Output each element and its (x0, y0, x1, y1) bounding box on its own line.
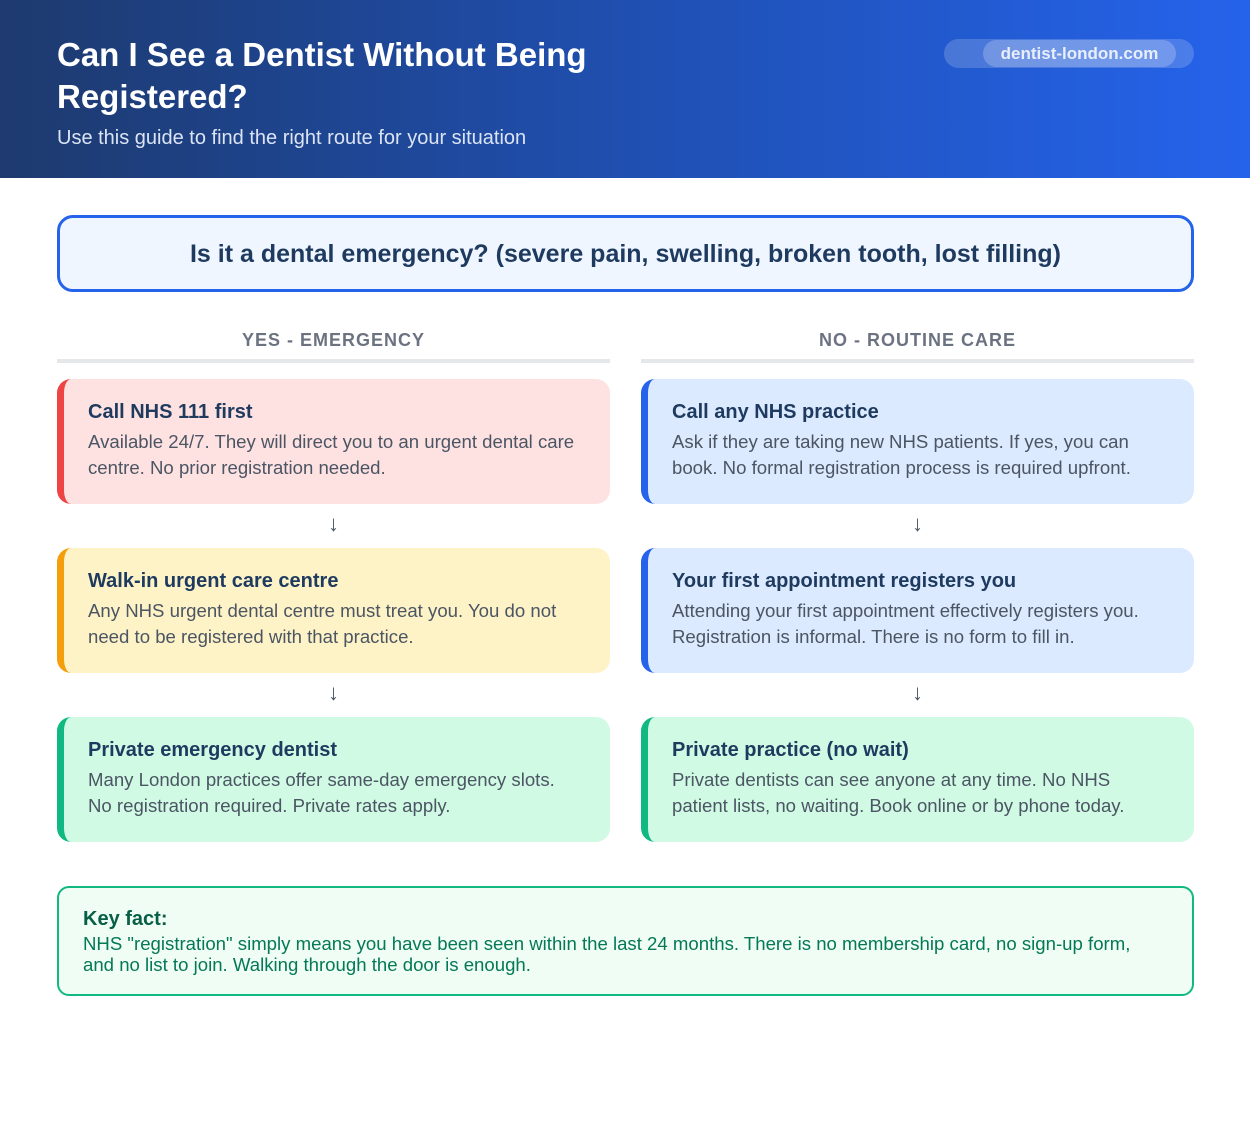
question box (57, 215, 1194, 292)
arrow: ↓ (912, 680, 923, 705)
key fact callout: Key fact: (83, 908, 167, 930)
card: call NHS practice: Ask if they are taking new NHS patients. If yes, you can book. No formal registration process is required upfront. (672, 431, 1131, 478)
site pill: dentist-london.com (1001, 44, 1158, 63)
subtitle: Use this guide to find the right route for your situation (57, 127, 526, 149)
arrow: ↓ (328, 680, 339, 705)
card: first appointment: Your first appointment registers you (672, 570, 1016, 592)
card: first appointment: Attending your first appointment effectively registers you. Registration is informal. There is no form to fill in. (672, 600, 1139, 647)
card: walk-in (57, 548, 610, 673)
key fact callout (57, 886, 1194, 996)
card: private emergency (57, 717, 610, 842)
title: Can I See a Dentist Without Being Registered? (57, 36, 587, 115)
card: call NHS 111: Available 24/7. They will direct you to an urgent dental care centre. No prior registration needed. (88, 431, 574, 478)
header banner (0, 0, 1250, 178)
arrow: ↓ (328, 511, 339, 536)
card: private emergency: Many London practices offer same-day emergency slots. No registration required. Private rates apply. (88, 769, 555, 816)
column heading: no: NO - ROUTINE CARE (819, 330, 1016, 350)
site pill (944, 39, 1194, 68)
card: first appointment (641, 548, 1194, 673)
arrow: ↓ (912, 511, 923, 536)
column heading: yes: YES - EMERGENCY (242, 330, 425, 350)
card: call NHS practice (641, 379, 1194, 504)
column heading: yes (57, 330, 610, 363)
column heading: no (641, 330, 1194, 363)
card: private practice: Private practice (no wait) (672, 739, 909, 761)
card: walk-in: Any NHS urgent dental centre must treat you. You do not need to be registered with that practice. (88, 600, 556, 647)
card: private practice (641, 717, 1194, 842)
card: private emergency: Private emergency dentist (88, 739, 337, 761)
key fact callout: NHS "registration" simply means you have been seen within the last 24 months. There is no membership card, no sign-up form, and no list to join. Walking through the door is enough. (83, 933, 1130, 975)
card: private practice: Private dentists can see anyone at any time. No NHS patient lists, no waiting. Book online or by phone today. (672, 769, 1124, 816)
card: call NHS 111: Call NHS 111 first (88, 401, 253, 423)
card: call NHS 111 (57, 379, 610, 504)
card: call NHS practice: Call any NHS practice (672, 401, 879, 423)
question box: Is it a dental emergency? (severe pain, swelling, broken tooth, lost filling) (190, 240, 1061, 268)
card: walk-in: Walk-in urgent care centre (88, 570, 338, 592)
